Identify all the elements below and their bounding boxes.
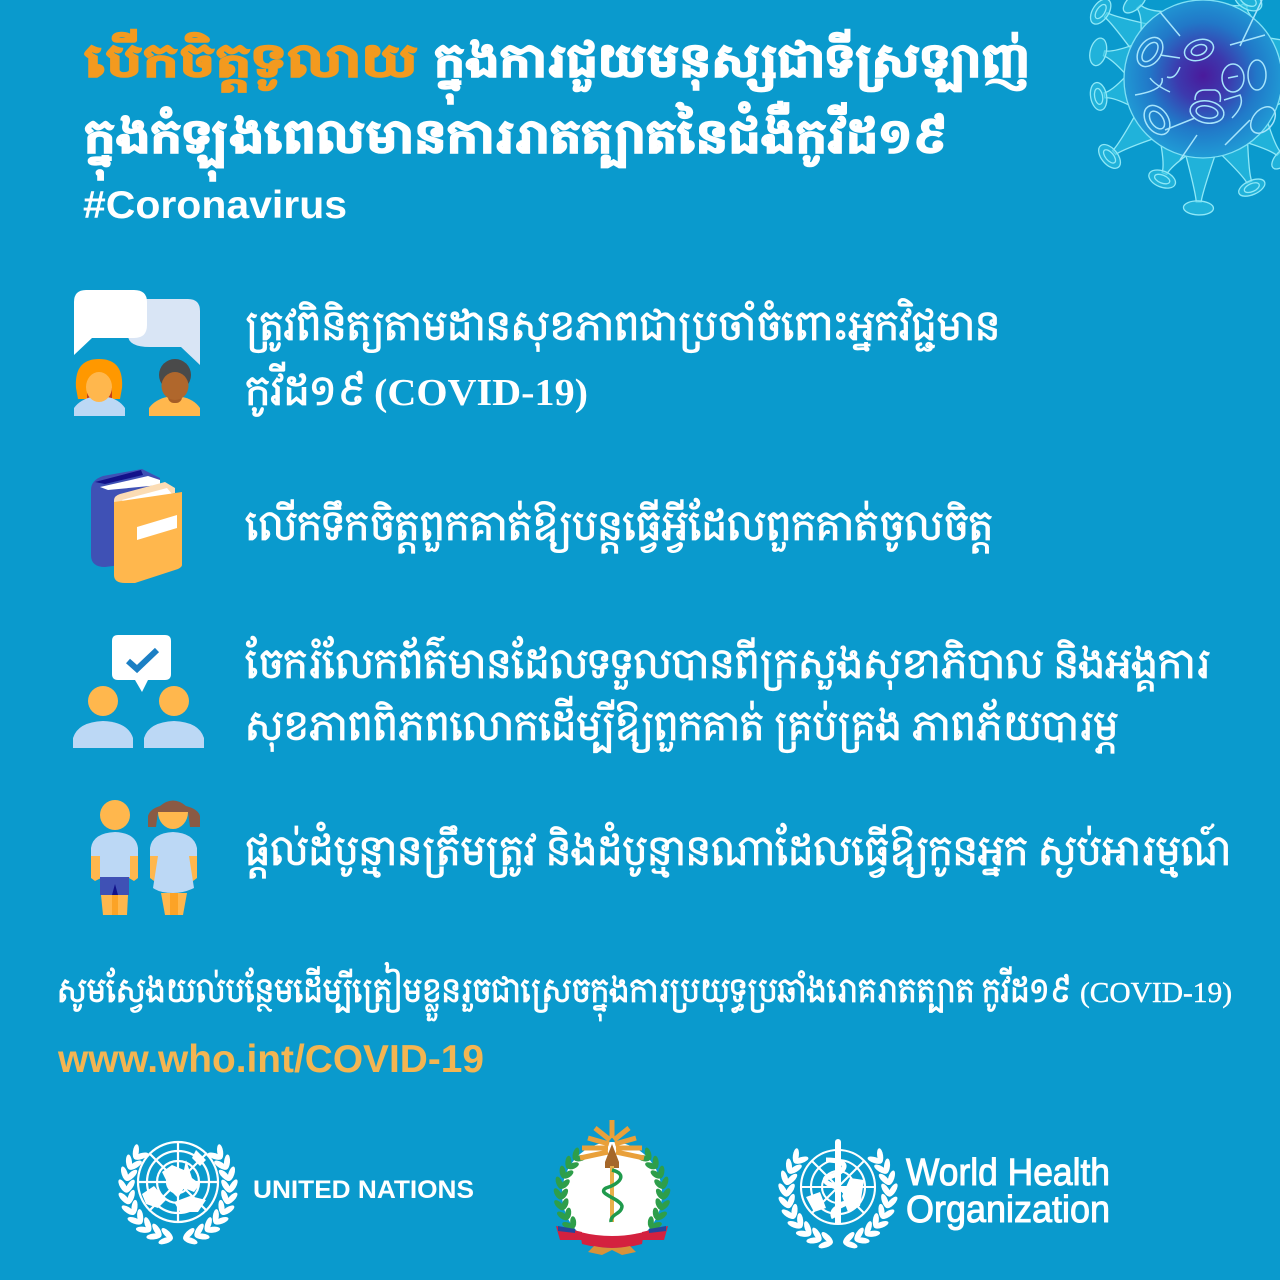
text: item 1: (COVID-19) bbox=[374, 372, 588, 414]
text: item 1: ត្រូវពិនិត្យតាមដានសុខភាពជាប្រចាំចំពោះអ្នកវិជ្ជមាន bbox=[245, 297, 1000, 353]
icon: speech bubbles and two people bbox=[74, 290, 200, 416]
title line 1: ក្នុងការជួយមនុស្សជាទីស្រឡាញ់ bbox=[434, 28, 1030, 105]
text: item 3 bbox=[245, 635, 1210, 754]
website link: www.who.int/COVID-19 bbox=[57, 1038, 484, 1081]
footer note: សូមស្វែងយល់បន្ថែមដើម្បីត្រៀមខ្លួនរួចជាស្រេចក្នុងការប្រយុទ្ធប្រឆាំងរោគរាតត្បាត កូវីដ១៩ bbox=[57, 962, 1072, 1021]
text: item 3: សុខភាពពិភពលោកដើម្បីឱ្យពួកគាត់ គ្រប់គ្រង ភាពភ័យបារម្ភ bbox=[245, 697, 1118, 754]
icon: books bbox=[91, 469, 182, 583]
title highlight: បើកចិត្តទូលាយ bbox=[84, 28, 418, 93]
icon: two people with checkmark bubble bbox=[73, 635, 204, 748]
text: item 3: ចែករំលែកព័ត៌មានដែលទទួលបានពីក្រសួងសុខាភិបាល និងអង្គការ bbox=[245, 635, 1210, 692]
footer note: (COVID-19) bbox=[1080, 978, 1232, 1009]
logo label: United Nations: UNITED NATIONS bbox=[253, 1176, 474, 1204]
logo: United Nations emblem bbox=[116, 1141, 240, 1249]
logo label: World Health Organization: World Health bbox=[906, 1152, 1110, 1194]
logo label: World Health Organization bbox=[906, 1152, 1110, 1231]
title line 2: ក្នុងកំឡុងពេលមានការរាតត្បាតនៃជំងឺកូវីដ១៩ bbox=[84, 101, 948, 181]
logo: World Health Organization emblem bbox=[776, 1139, 900, 1253]
text: item 1 bbox=[245, 297, 1000, 417]
icon: two children bbox=[91, 800, 200, 915]
virus illustration bbox=[1086, 0, 1280, 215]
text: item 4: ផ្តល់ដំបូន្មានត្រឹមត្រូវ និងដំបូន្មានណាដែលធ្វើឱ្យកូនអ្នក ស្ងប់អារម្មណ៍ bbox=[245, 822, 1231, 879]
hashtag: #Coronavirus bbox=[83, 184, 347, 227]
text: item 1: កូវីដ១៩ bbox=[245, 362, 367, 417]
title bbox=[84, 28, 1030, 181]
logo label: World Health Organization: Organization bbox=[906, 1189, 1110, 1231]
logo: Ministry of Health emblem bbox=[552, 1120, 672, 1255]
text: item 2: លើកទឹកចិត្តពួកគាត់ឱ្យបន្តធ្វើអ្វីដែលពួកគាត់ចូលចិត្ត bbox=[245, 497, 993, 554]
